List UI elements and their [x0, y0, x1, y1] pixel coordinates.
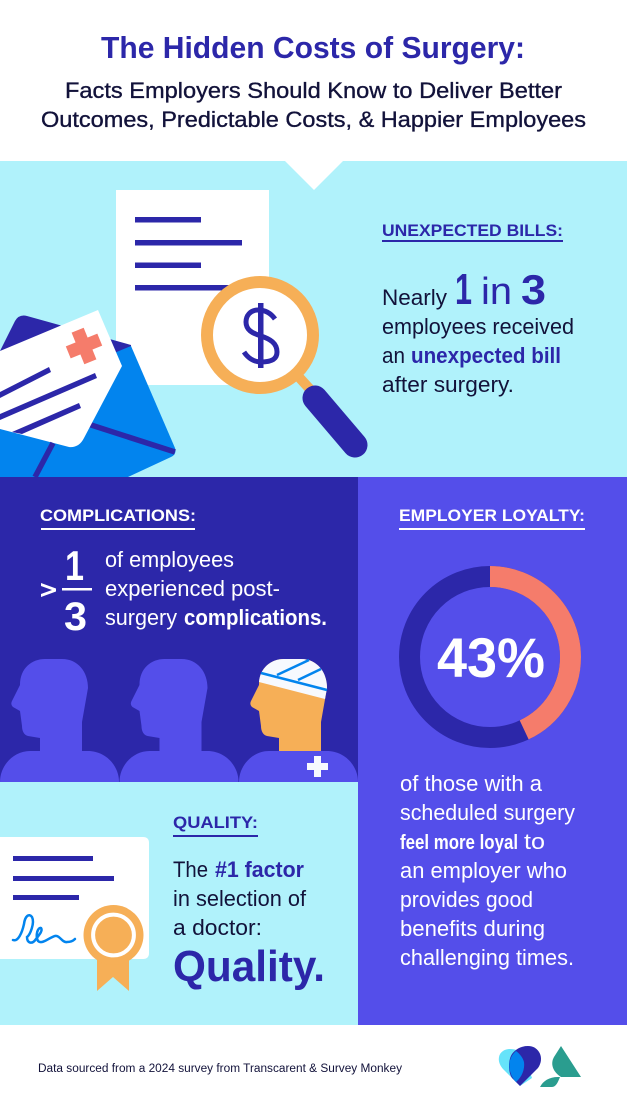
icon: person two [120, 659, 238, 782]
text: number one factor: in selection of [173, 886, 307, 911]
text: loyalty stat: to [524, 829, 545, 854]
text: complications stat: surgery [105, 605, 177, 630]
text: loyalty stat: provides good [400, 887, 533, 912]
text: 1 in 3 employees: employees received [382, 314, 574, 339]
panel: complications [0, 477, 358, 782]
panel: unexpected bills [0, 161, 627, 477]
panel: quality [0, 782, 358, 1025]
text: number one factor: Quality. [173, 942, 325, 991]
text: 1 in 3 employees: in [481, 271, 512, 313]
fraction: more than one third [41, 542, 92, 639]
text: number one factor [173, 857, 325, 991]
icon: injured person with bandage [239, 659, 358, 782]
text: 1 in 3 employees: 3 [521, 266, 546, 313]
header [41, 31, 586, 132]
logo: teal mark [540, 1046, 581, 1087]
text: complications stat [105, 547, 327, 630]
text: loyalty stat: scheduled surgery [400, 800, 575, 825]
subtitle: Outcomes, Predictable Costs, & Happier Employees [41, 107, 586, 132]
heading: unexpected bills: UNEXPECTED BILLS: [382, 221, 563, 240]
fraction: more than one third: 1 [65, 542, 84, 589]
text: 1 in 3 employees: 1 [455, 265, 472, 314]
text: 1 in 3 employees: an [382, 343, 405, 368]
panel: employer loyalty [358, 477, 627, 1025]
heading: quality: QUALITY: [173, 813, 258, 832]
text: 1 in 3 employees [382, 265, 574, 397]
icon: person one [0, 659, 119, 782]
text: loyalty stat: an employer who [400, 858, 567, 883]
heading: employer loyalty: EMPLOYER LOYALTY: [399, 506, 585, 525]
fraction: more than one third: 3 [64, 595, 87, 639]
text: complications stat: of employees [105, 547, 234, 572]
donut chart: 43% [410, 576, 570, 738]
subtitle [41, 78, 586, 132]
logo: heart mark [499, 1046, 541, 1086]
subtitle: Facts Employers Should Know to Deliver Better [65, 78, 562, 103]
text: number one factor: #1 factor [215, 857, 304, 882]
text: loyalty stat: challenging times. [400, 945, 574, 970]
text: complications stat: experienced post- [105, 576, 280, 601]
text: loyalty stat: of those with a [400, 771, 543, 796]
heading: complications: COMPLICATIONS: [40, 506, 196, 525]
text: complications stat: complications. [184, 605, 327, 630]
icon: certificate [0, 837, 149, 991]
text: loyalty stat [400, 771, 575, 970]
text: 1 in 3 employees: after surgery. [382, 372, 514, 397]
text: number one factor: a doctor: [173, 915, 262, 940]
text: number one factor: The [173, 857, 208, 882]
donut chart: 43%: 43% [437, 626, 545, 689]
icon: magnifying glass with dollar [207, 282, 355, 445]
text: loyalty stat: benefits during [400, 916, 545, 941]
text: loyalty stat: feel more loyal [400, 832, 518, 854]
footer source note: Data sourced from a 2024 survey from Transcarent & Survey Monkey [38, 1063, 402, 1075]
text: 1 in 3 employees: unexpected bill [411, 343, 561, 368]
icon: envelope with card [0, 310, 176, 477]
text: 1 in 3 employees: Nearly [382, 285, 447, 310]
icon: document [116, 190, 269, 385]
title: The Hidden Costs of Surgery: [101, 31, 525, 65]
